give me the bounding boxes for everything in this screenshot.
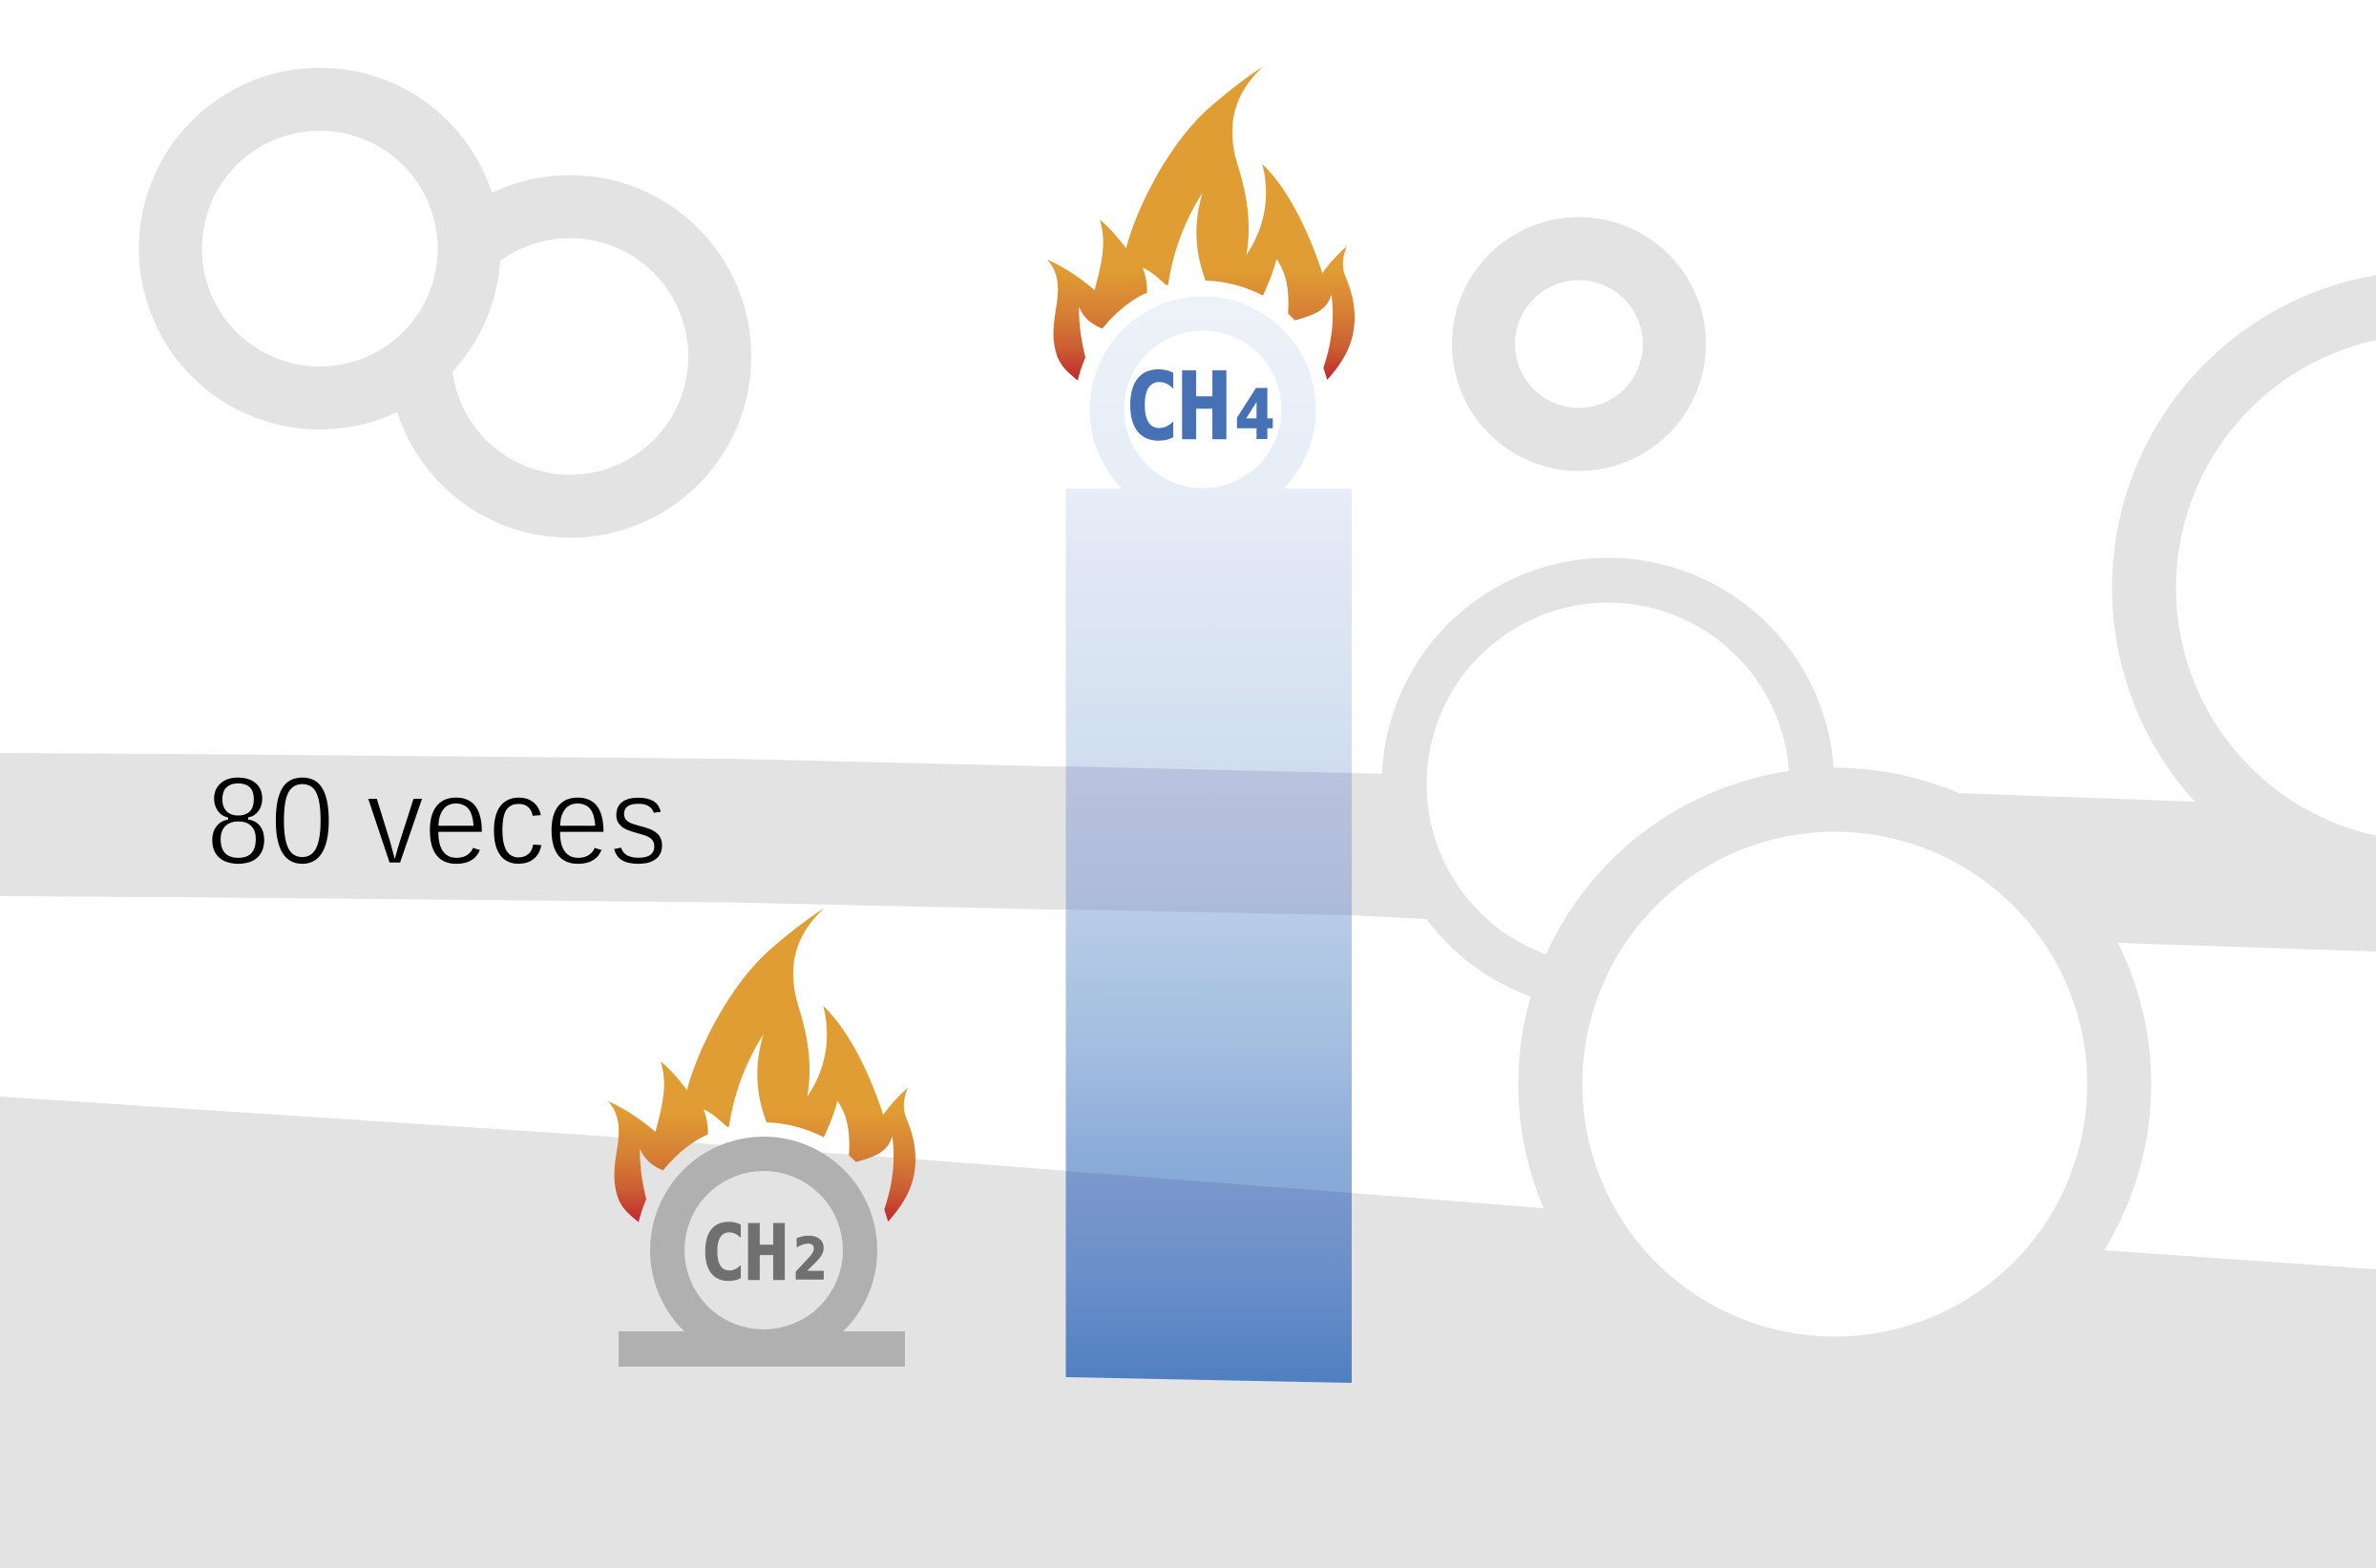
CH4 column bar <box>1065 489 1352 1202</box>
CH2 formula <box>700 1209 828 1299</box>
background: grey lower ground <box>0 1097 2376 1568</box>
CH2 formula: H <box>743 1209 789 1299</box>
CH2 formula: C <box>700 1209 746 1299</box>
CH2 base <box>619 1331 905 1367</box>
CH2 burner: ring and base <box>619 1154 905 1367</box>
icon: flame above CH4 <box>1047 67 1355 381</box>
decorative bubble: large lower right <box>1550 800 2119 1369</box>
CH4 column over lower ground <box>1065 1171 1352 1383</box>
CH4 column over upper band <box>1065 766 1352 915</box>
CH4 gauge: ring and column <box>1065 313 1352 1383</box>
label: 80 veces: 80 veces <box>206 750 667 890</box>
CH2 formula: 2 <box>793 1226 828 1293</box>
decorative bubble: small top centre <box>1483 248 1674 439</box>
CH2 ring <box>667 1154 860 1347</box>
background: grey upper band <box>0 753 2376 951</box>
CH4 formula: 4 <box>1234 375 1275 454</box>
CH4 ring <box>1107 313 1298 506</box>
CH4 formula: C <box>1124 353 1180 462</box>
decorative bubbles: top left pair <box>170 99 720 506</box>
decorative bubble: medium behind large <box>1404 580 1812 988</box>
CH4 formula <box>1124 353 1275 462</box>
decorative bubble: top right large <box>2144 303 2376 873</box>
CH4 formula: H <box>1176 353 1232 462</box>
icon: flame above CH2 <box>608 909 915 1223</box>
